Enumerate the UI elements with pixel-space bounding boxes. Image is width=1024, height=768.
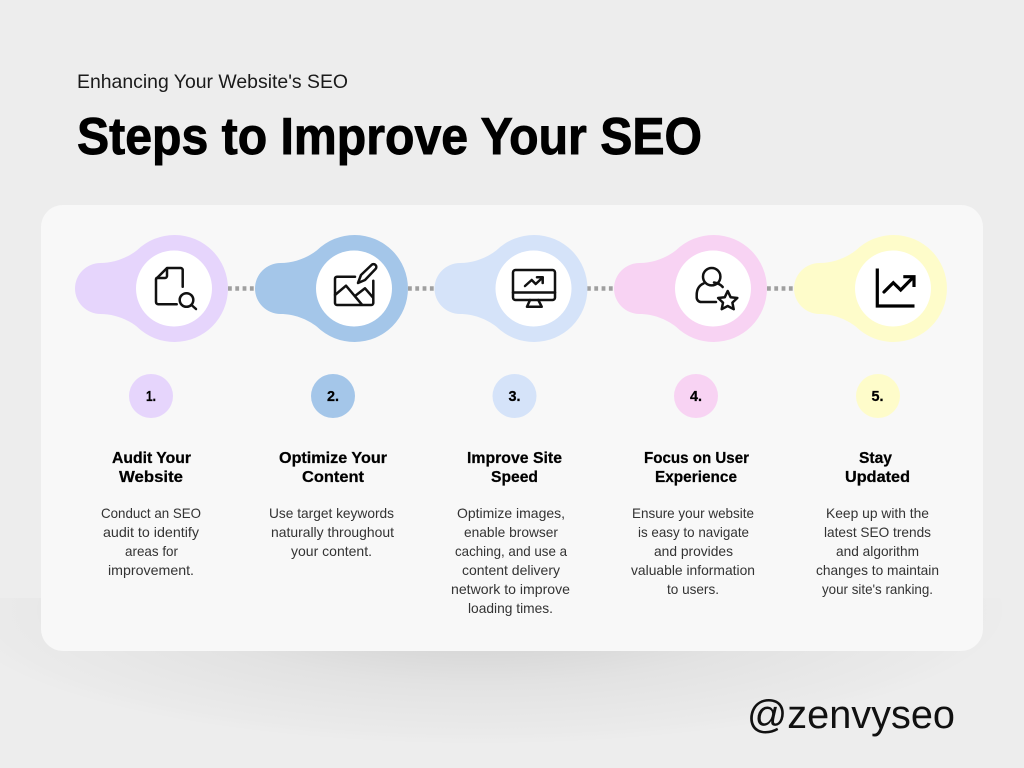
step 2 heading: Optimize Your: [279, 450, 387, 467]
step 5 heading: [845, 450, 910, 486]
step 3 number: 3.: [508, 389, 520, 405]
step 5 heading: Stay: [859, 450, 892, 467]
step 5 description: and algorithm: [836, 543, 919, 559]
panel shadow: [177, 651, 784, 698]
step 4 number: 4.: [690, 389, 702, 405]
step 5 number: [856, 374, 900, 418]
step 4 heading: Experience: [655, 469, 737, 486]
subtitle: Enhancing Your Website's SEO: [77, 71, 348, 93]
step 3 heading: [467, 450, 562, 486]
step 3 blob: [435, 235, 587, 342]
step 5 description: Keep up with the: [826, 505, 929, 521]
handle: @zenvyseo: [747, 693, 955, 737]
step 1 number: 1.: [146, 389, 156, 405]
step 3 description: caching, and use a: [455, 543, 567, 559]
step 2 heading: Content: [302, 469, 364, 486]
step 4 description: and provides: [654, 543, 733, 559]
step 5 heading: Updated: [845, 469, 910, 486]
panel: steps: [41, 205, 983, 651]
step 4 description: [631, 505, 755, 597]
step 4 description: Ensure your website: [632, 505, 754, 521]
step 5 blob: [794, 235, 947, 342]
step 5 description: your site's ranking.: [822, 581, 933, 597]
step 4 heading: Focus on User: [644, 450, 749, 467]
step 5 description: changes to maintain: [816, 562, 939, 578]
title: Steps to Improve Your SEO: [77, 108, 702, 166]
step 1 number: [129, 374, 173, 418]
step 3 description: enable browser: [464, 524, 558, 540]
icon: image edit: [335, 264, 376, 305]
icon: document search: [156, 268, 196, 309]
step 2 description: Use target keywords: [269, 505, 394, 521]
step 1 heading: Audit Your: [112, 450, 191, 467]
dotted connectors: [228, 286, 794, 291]
step 3 description: content delivery: [462, 562, 560, 578]
step 3 description: Optimize images,: [457, 505, 565, 521]
icon: monitor with trend: [513, 270, 555, 307]
step 3 description: [451, 505, 570, 616]
step 3 description: loading times.: [468, 600, 553, 616]
step 5 description: latest SEO trends: [824, 524, 931, 540]
step 1 blob: [75, 235, 228, 342]
step 3 description: network to improve: [451, 581, 570, 597]
step 2 number: [311, 374, 355, 418]
step 5 number: 5.: [872, 389, 884, 405]
step 5 description: [816, 505, 939, 597]
step 2 number: 2.: [327, 389, 339, 405]
step 1 heading: [112, 450, 191, 486]
step 4 description: is easy to navigate: [638, 524, 749, 540]
step 1 description: audit to identify: [103, 524, 199, 540]
step 4 blob: [614, 235, 767, 342]
step 4 number: [674, 374, 718, 418]
icon: growth chart: [877, 268, 914, 306]
step 2 heading: [279, 450, 387, 486]
step 2 blob: [255, 235, 408, 342]
step 3 number: [492, 374, 536, 418]
step 3 heading: Improve Site: [467, 450, 562, 467]
step 1 description: areas for: [125, 543, 178, 559]
step 4 description: valuable information: [631, 562, 755, 578]
step 2 description: [269, 505, 394, 559]
step 3 heading: Speed: [491, 469, 538, 486]
step 1 heading: Website: [119, 469, 183, 486]
step 1 description: improvement.: [108, 562, 194, 578]
step 4 description: to users.: [667, 581, 719, 597]
step 1 description: Conduct an SEO: [101, 505, 201, 521]
step 4 heading: [644, 450, 749, 486]
icon: user star: [697, 268, 737, 309]
step 1 description: [101, 505, 201, 578]
step 2 description: your content.: [291, 543, 372, 559]
step 2 description: naturally throughout: [271, 524, 394, 540]
